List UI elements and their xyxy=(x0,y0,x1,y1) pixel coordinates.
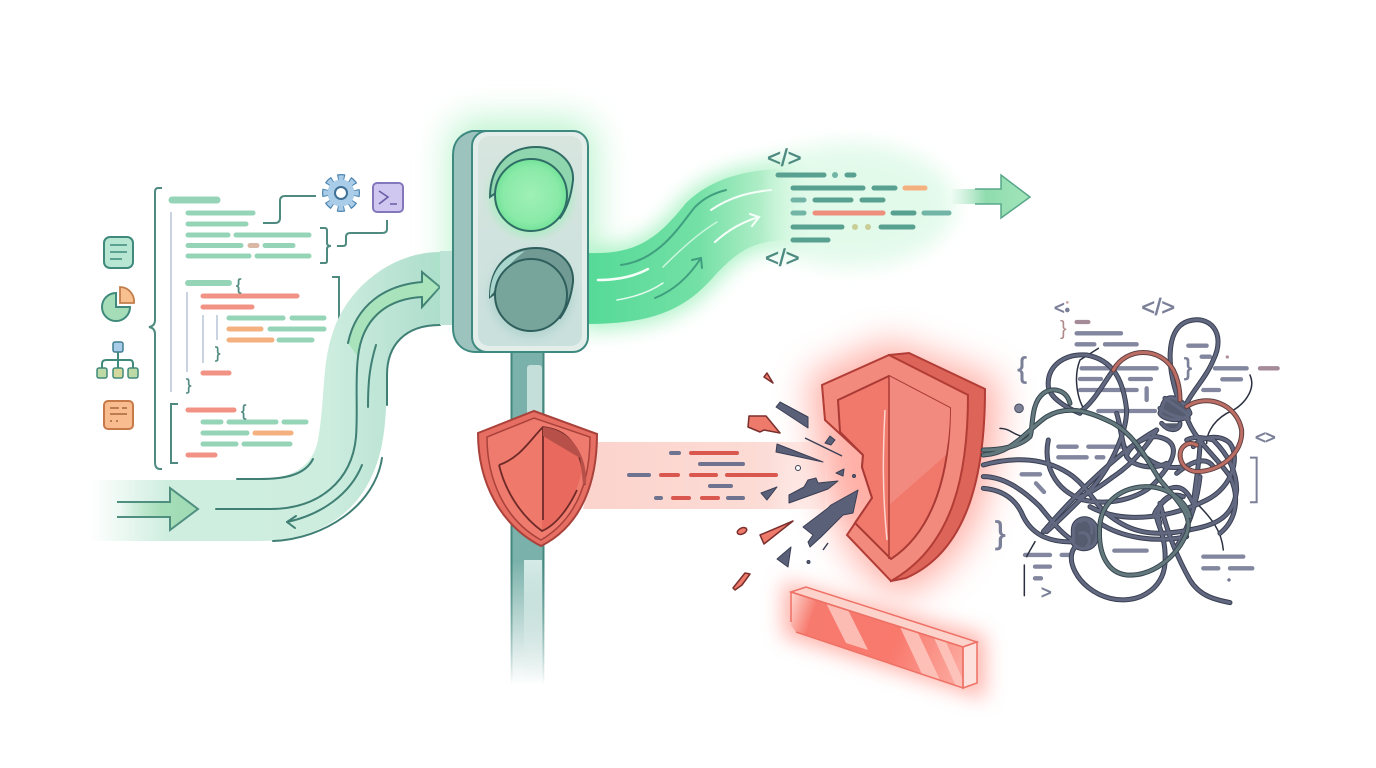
icon: pie chart xyxy=(102,287,134,321)
top face xyxy=(791,587,977,647)
code symbols xyxy=(995,294,1275,602)
code brace glyphs xyxy=(186,277,247,420)
red glow behind big shield xyxy=(822,355,985,581)
icon: note card xyxy=(104,401,133,429)
icon: gear xyxy=(326,178,356,208)
upper curved arrow xyxy=(348,272,440,357)
icon: document xyxy=(104,237,133,268)
green pass stream xyxy=(588,143,955,324)
code symbols: } xyxy=(1184,354,1192,381)
side brackets xyxy=(171,228,345,463)
outer left brace xyxy=(149,188,162,469)
code brace glyphs: { xyxy=(241,403,247,420)
stream outlines xyxy=(216,272,440,541)
pole xyxy=(511,353,544,685)
code symbols: < xyxy=(1054,297,1065,318)
connector from code to gear xyxy=(263,196,316,223)
stream ribbon xyxy=(588,168,790,324)
panel: code document input xyxy=(149,188,387,469)
small shield on pole xyxy=(478,411,597,546)
flow lines xyxy=(598,190,771,300)
inner plate xyxy=(838,376,950,559)
warm tokens xyxy=(905,186,925,190)
code tag bottom: </> xyxy=(765,245,800,272)
input arrow xyxy=(117,488,198,530)
centre crease xyxy=(888,376,890,559)
housing side xyxy=(453,131,490,352)
stripes xyxy=(826,603,963,688)
red glow behind barrier xyxy=(791,592,977,688)
output code block xyxy=(765,145,949,272)
traffic light xyxy=(440,131,588,352)
stream glow xyxy=(588,168,790,324)
code brace glyphs: } xyxy=(186,377,192,394)
big broken shield xyxy=(822,353,985,581)
mount bracket xyxy=(440,251,466,325)
code symbols: </> xyxy=(1141,294,1175,320)
side wall xyxy=(889,353,985,581)
code symbols: { xyxy=(1017,352,1027,384)
code symbols: <> xyxy=(1255,426,1275,447)
front plate xyxy=(822,355,968,581)
red data band xyxy=(583,442,825,509)
red shards xyxy=(733,373,793,590)
output arrow xyxy=(951,175,1030,218)
light half of plate xyxy=(889,376,950,505)
teal code bars xyxy=(778,175,949,240)
tangled code xyxy=(983,294,1278,603)
red stream code bars xyxy=(629,453,776,498)
code symbols: > xyxy=(1041,581,1052,602)
green glow behind traffic light xyxy=(450,120,595,310)
code halo xyxy=(745,143,955,267)
orange code bars xyxy=(229,329,291,433)
connector from brace to terminal xyxy=(337,220,387,246)
stream ribbon xyxy=(90,252,466,541)
dark wires xyxy=(983,320,1242,603)
thin splinters xyxy=(805,438,842,550)
grey code bars xyxy=(1022,333,1252,578)
housing face xyxy=(472,131,588,352)
outline xyxy=(791,592,963,688)
indent guide lines xyxy=(171,212,217,392)
icon: terminal xyxy=(373,183,403,212)
code brace glyphs: } xyxy=(215,345,221,362)
barrier xyxy=(791,587,977,688)
code brace glyphs: { xyxy=(236,277,242,294)
front face xyxy=(791,592,963,688)
tangled code: } xyxy=(1060,318,1067,340)
end face xyxy=(963,642,977,688)
code tag top: </> xyxy=(767,145,802,172)
icon: hierarchy xyxy=(97,342,138,378)
thin wires xyxy=(1000,348,1252,596)
dark shards xyxy=(761,402,858,567)
green code bars xyxy=(172,200,324,444)
mauve code tokens xyxy=(1077,322,1278,368)
top lamp xyxy=(490,147,573,235)
debris fragments xyxy=(733,373,858,590)
input stream xyxy=(90,252,466,541)
tan token xyxy=(250,243,257,248)
bottom lamp xyxy=(490,248,573,336)
red code bars xyxy=(188,296,297,455)
right bracket xyxy=(1250,458,1257,502)
code symbols: } xyxy=(995,514,1006,550)
